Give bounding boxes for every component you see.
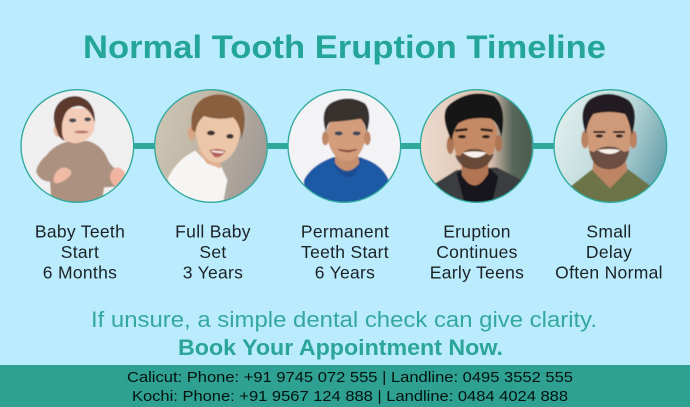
contact: Kochi: Kochi: Phone: +91 9567 124 888 | Landline: 0484 4024 888	[132, 388, 568, 405]
caption: baby teeth start: Start	[61, 242, 99, 262]
portrait: boy in blue shirt	[287, 89, 402, 203]
portrait: teenager	[420, 89, 534, 203]
tagline: If unsure, a simple dental check can give clarity.	[91, 307, 597, 332]
caption: full baby set: Full Baby	[175, 222, 251, 242]
caption: eruption continues: Early Teens	[430, 262, 524, 282]
caption: baby teeth start: 6 Months	[43, 262, 117, 282]
caption: baby teeth start: Baby Teeth	[35, 222, 125, 242]
call to action: Book Your Appointment Now.	[178, 335, 503, 360]
caption: permanent teeth start: Permanent	[301, 222, 389, 242]
caption: full baby set: 3 Years	[183, 262, 243, 282]
caption: eruption continues: Eruption	[443, 222, 511, 242]
caption: permanent teeth start: 6 Years	[315, 262, 375, 282]
portrait: baby	[20, 89, 134, 203]
caption: small delay: Delay	[586, 242, 632, 262]
portrait: toddler	[154, 89, 268, 203]
timeline connectors	[133, 143, 556, 149]
title: Normal Tooth Eruption Timeline	[83, 29, 606, 65]
contact: Calicut: Calicut: Phone: +91 9745 072 555 | Landline: 0495 3552 555	[127, 369, 573, 386]
caption: eruption continues: Continues	[436, 242, 518, 262]
caption: small delay: Often Normal	[555, 262, 663, 282]
footer band	[0, 365, 690, 407]
caption: full baby set: Set	[199, 242, 227, 262]
portrait: adult man	[553, 89, 668, 203]
caption: small delay: Small	[586, 222, 632, 242]
caption: permanent teeth start: Teeth Start	[301, 242, 389, 262]
